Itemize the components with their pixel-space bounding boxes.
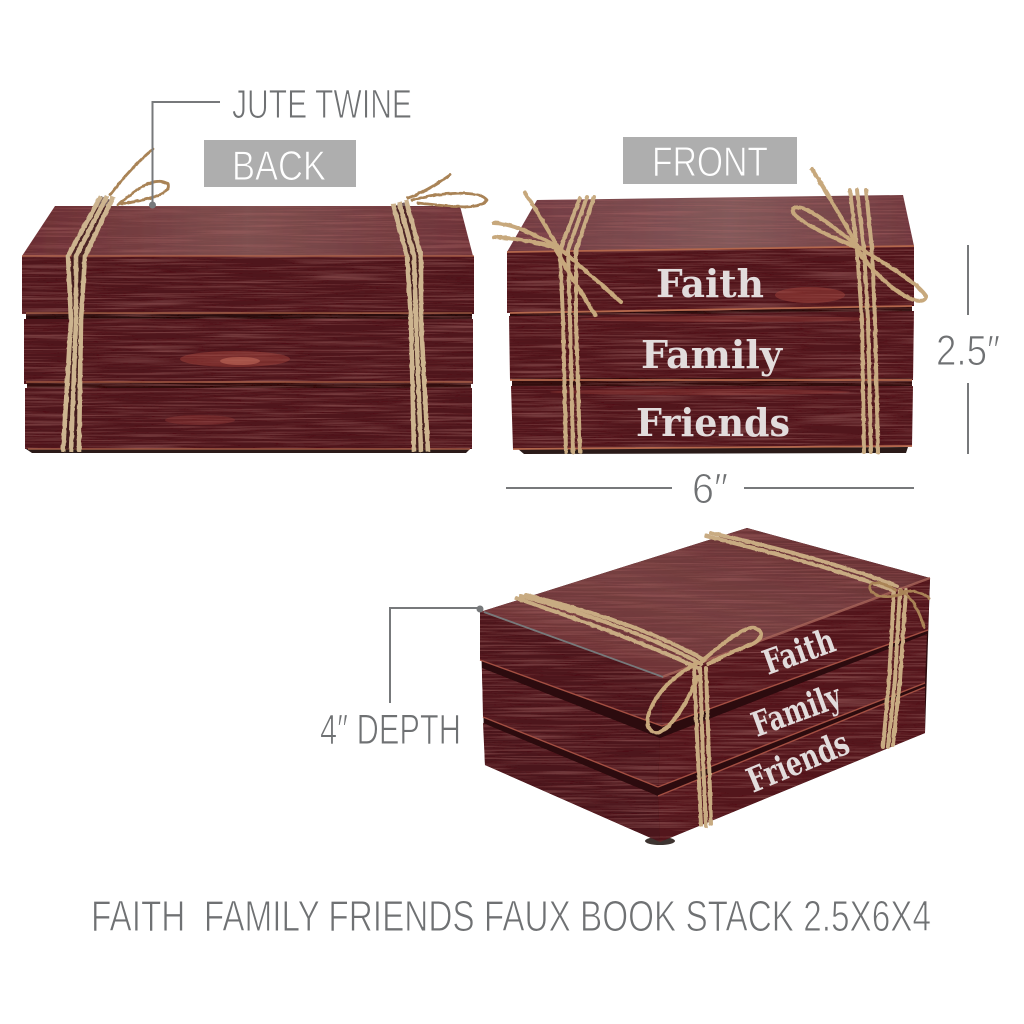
label: 4 inch depth: 4″ DEPTH — [320, 706, 461, 754]
twine: front right band and bow — [793, 169, 926, 452]
label: jute twine: JUTE TWINE — [232, 81, 412, 127]
label: back: BACK — [232, 142, 326, 189]
spine text: Friends angled: Friends — [741, 723, 855, 801]
twine: angled near band and bow — [516, 595, 761, 826]
spine text: Family angled: Family — [746, 676, 847, 745]
twine: front left band and bow — [494, 193, 621, 452]
callout: 4 inch depth leader — [390, 606, 663, 703]
callout: jute twine leader — [149, 102, 220, 208]
product: back view book stack — [22, 149, 487, 453]
product: angled view book stack — [480, 528, 930, 845]
twine: back right band and bow — [393, 175, 487, 452]
spine text: Faith angled: Faith — [758, 621, 841, 683]
product: front view book stack — [494, 169, 926, 454]
spine text: Friends: Friends — [636, 400, 790, 445]
dimension: 2.5 inch height: 2.5″ — [936, 327, 1000, 375]
dimension: 6 inch width: 6″ — [692, 465, 728, 513]
spine text: Faith: Faith — [656, 261, 764, 306]
label: front: FRONT — [652, 138, 768, 185]
spine text: Family: Family — [641, 332, 783, 377]
twine: back left band and bow — [63, 149, 168, 452]
twine: angled far band and bow — [706, 533, 929, 747]
